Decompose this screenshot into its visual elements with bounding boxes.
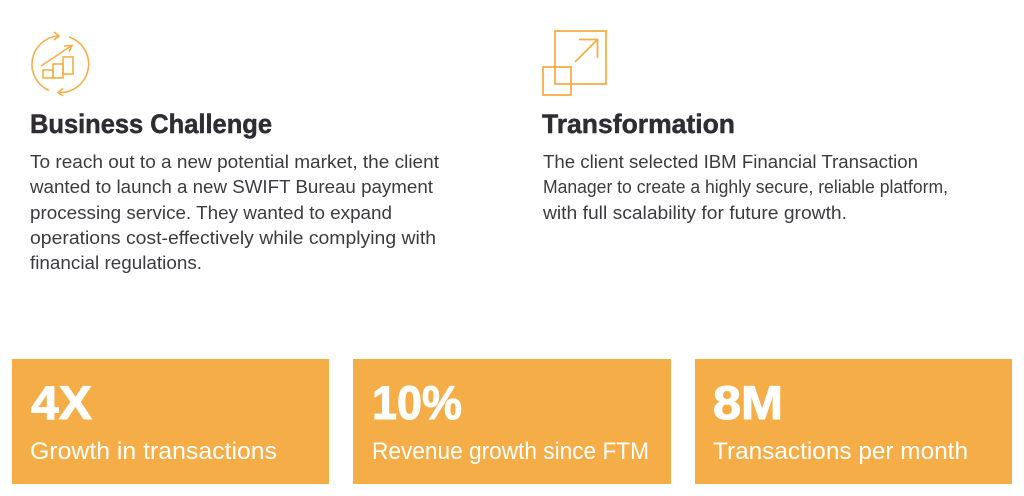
stat card: 10% revenue growth bbox=[353, 359, 671, 484]
text block: transformation description: with full scalability for future growth. bbox=[542, 203, 847, 223]
text block: business challenge description: wanted to launch a new SWIFT Bureau payment bbox=[29, 177, 433, 197]
icon: growth chart in circular arrows bbox=[32, 32, 89, 96]
stat label: revenue growth since FTM: Revenue growth since FTM bbox=[372, 438, 649, 465]
stat card: 8M transactions per month bbox=[695, 359, 1012, 484]
heading: transformation: Transformation bbox=[542, 109, 735, 139]
stat value: 10%: 10% bbox=[372, 376, 462, 429]
stat value: 8M: 8M bbox=[713, 376, 783, 429]
text block: transformation description bbox=[542, 152, 948, 223]
text block: business challenge description: To reach out to a new potential market, the client bbox=[30, 152, 439, 172]
stat value: 4X: 4X bbox=[31, 376, 92, 429]
stat card: 4X growth in transactions bbox=[12, 359, 329, 484]
heading: business challenge: Business Challenge bbox=[30, 109, 272, 139]
stat label: transactions per month: Transactions per month bbox=[713, 438, 968, 465]
stat label: growth in transactions: Growth in transactions bbox=[30, 438, 277, 465]
text block: transformation description: Manager to create a highly secure, reliable platform, bbox=[543, 177, 948, 197]
text block: business challenge description: operations cost-effectively while complying with bbox=[30, 228, 436, 248]
text block: business challenge description: financial regulations. bbox=[30, 253, 202, 273]
text block: business challenge description bbox=[29, 152, 439, 273]
icon: expanding squares with arrow bbox=[543, 31, 606, 95]
text block: business challenge description: processing service. They wanted to expand bbox=[30, 203, 392, 223]
panel: business challenge bbox=[29, 32, 439, 273]
panel: transformation bbox=[542, 31, 948, 223]
text block: transformation description: The client selected IBM Financial Transaction bbox=[543, 152, 918, 172]
